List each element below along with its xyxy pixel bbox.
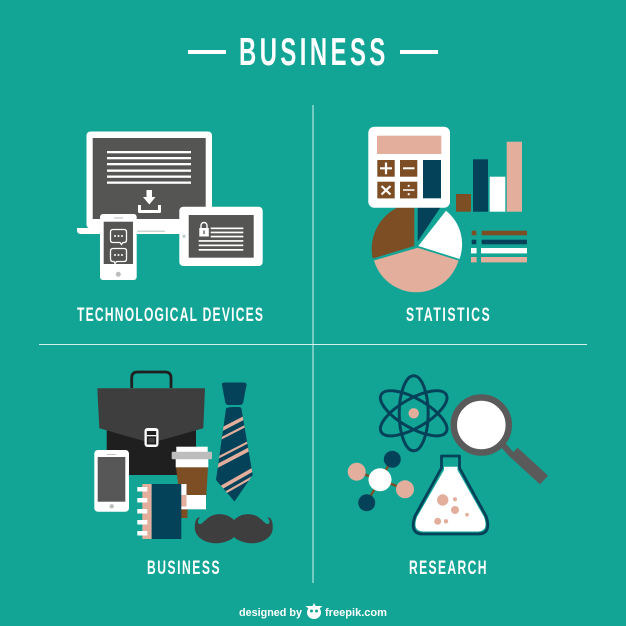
title: BUSINESS: [239, 30, 385, 73]
footer credit: [239, 603, 387, 619]
panel: statistics: [368, 127, 527, 326]
icon: freepik logo: [306, 603, 322, 619]
icon: calculator: [368, 127, 450, 208]
panel: research: [348, 376, 544, 579]
panel: business: [94, 372, 273, 579]
icon: atom: [374, 376, 453, 451]
title: [188, 30, 438, 73]
icon: briefcase: [97, 372, 205, 475]
label: TECHNOLOGICAL DEVICES: [77, 304, 263, 326]
panel: technological devices: [77, 132, 263, 326]
icon: magnifying glass: [454, 398, 544, 480]
label: BUSINESS: [147, 557, 220, 579]
icon: mustache: [195, 514, 273, 543]
icon: tablet: [179, 207, 263, 266]
icon: smartphone: [100, 214, 137, 280]
bar chart: [456, 142, 522, 212]
icon: coffee cup: [172, 447, 212, 518]
icon: laptop: [77, 132, 212, 234]
pie chart: [372, 198, 462, 292]
label: RESEARCH: [409, 557, 487, 579]
footer credit: designed by: [239, 607, 303, 619]
icon: notebook: [137, 484, 186, 539]
icon: phone: [94, 450, 129, 512]
icon: molecule: [348, 451, 414, 511]
label: STATISTICS: [406, 304, 490, 326]
icon: flask: [413, 456, 488, 534]
icon: tie: [216, 382, 253, 502]
legend: [471, 231, 527, 262]
footer credit: freepik.com: [325, 607, 387, 619]
